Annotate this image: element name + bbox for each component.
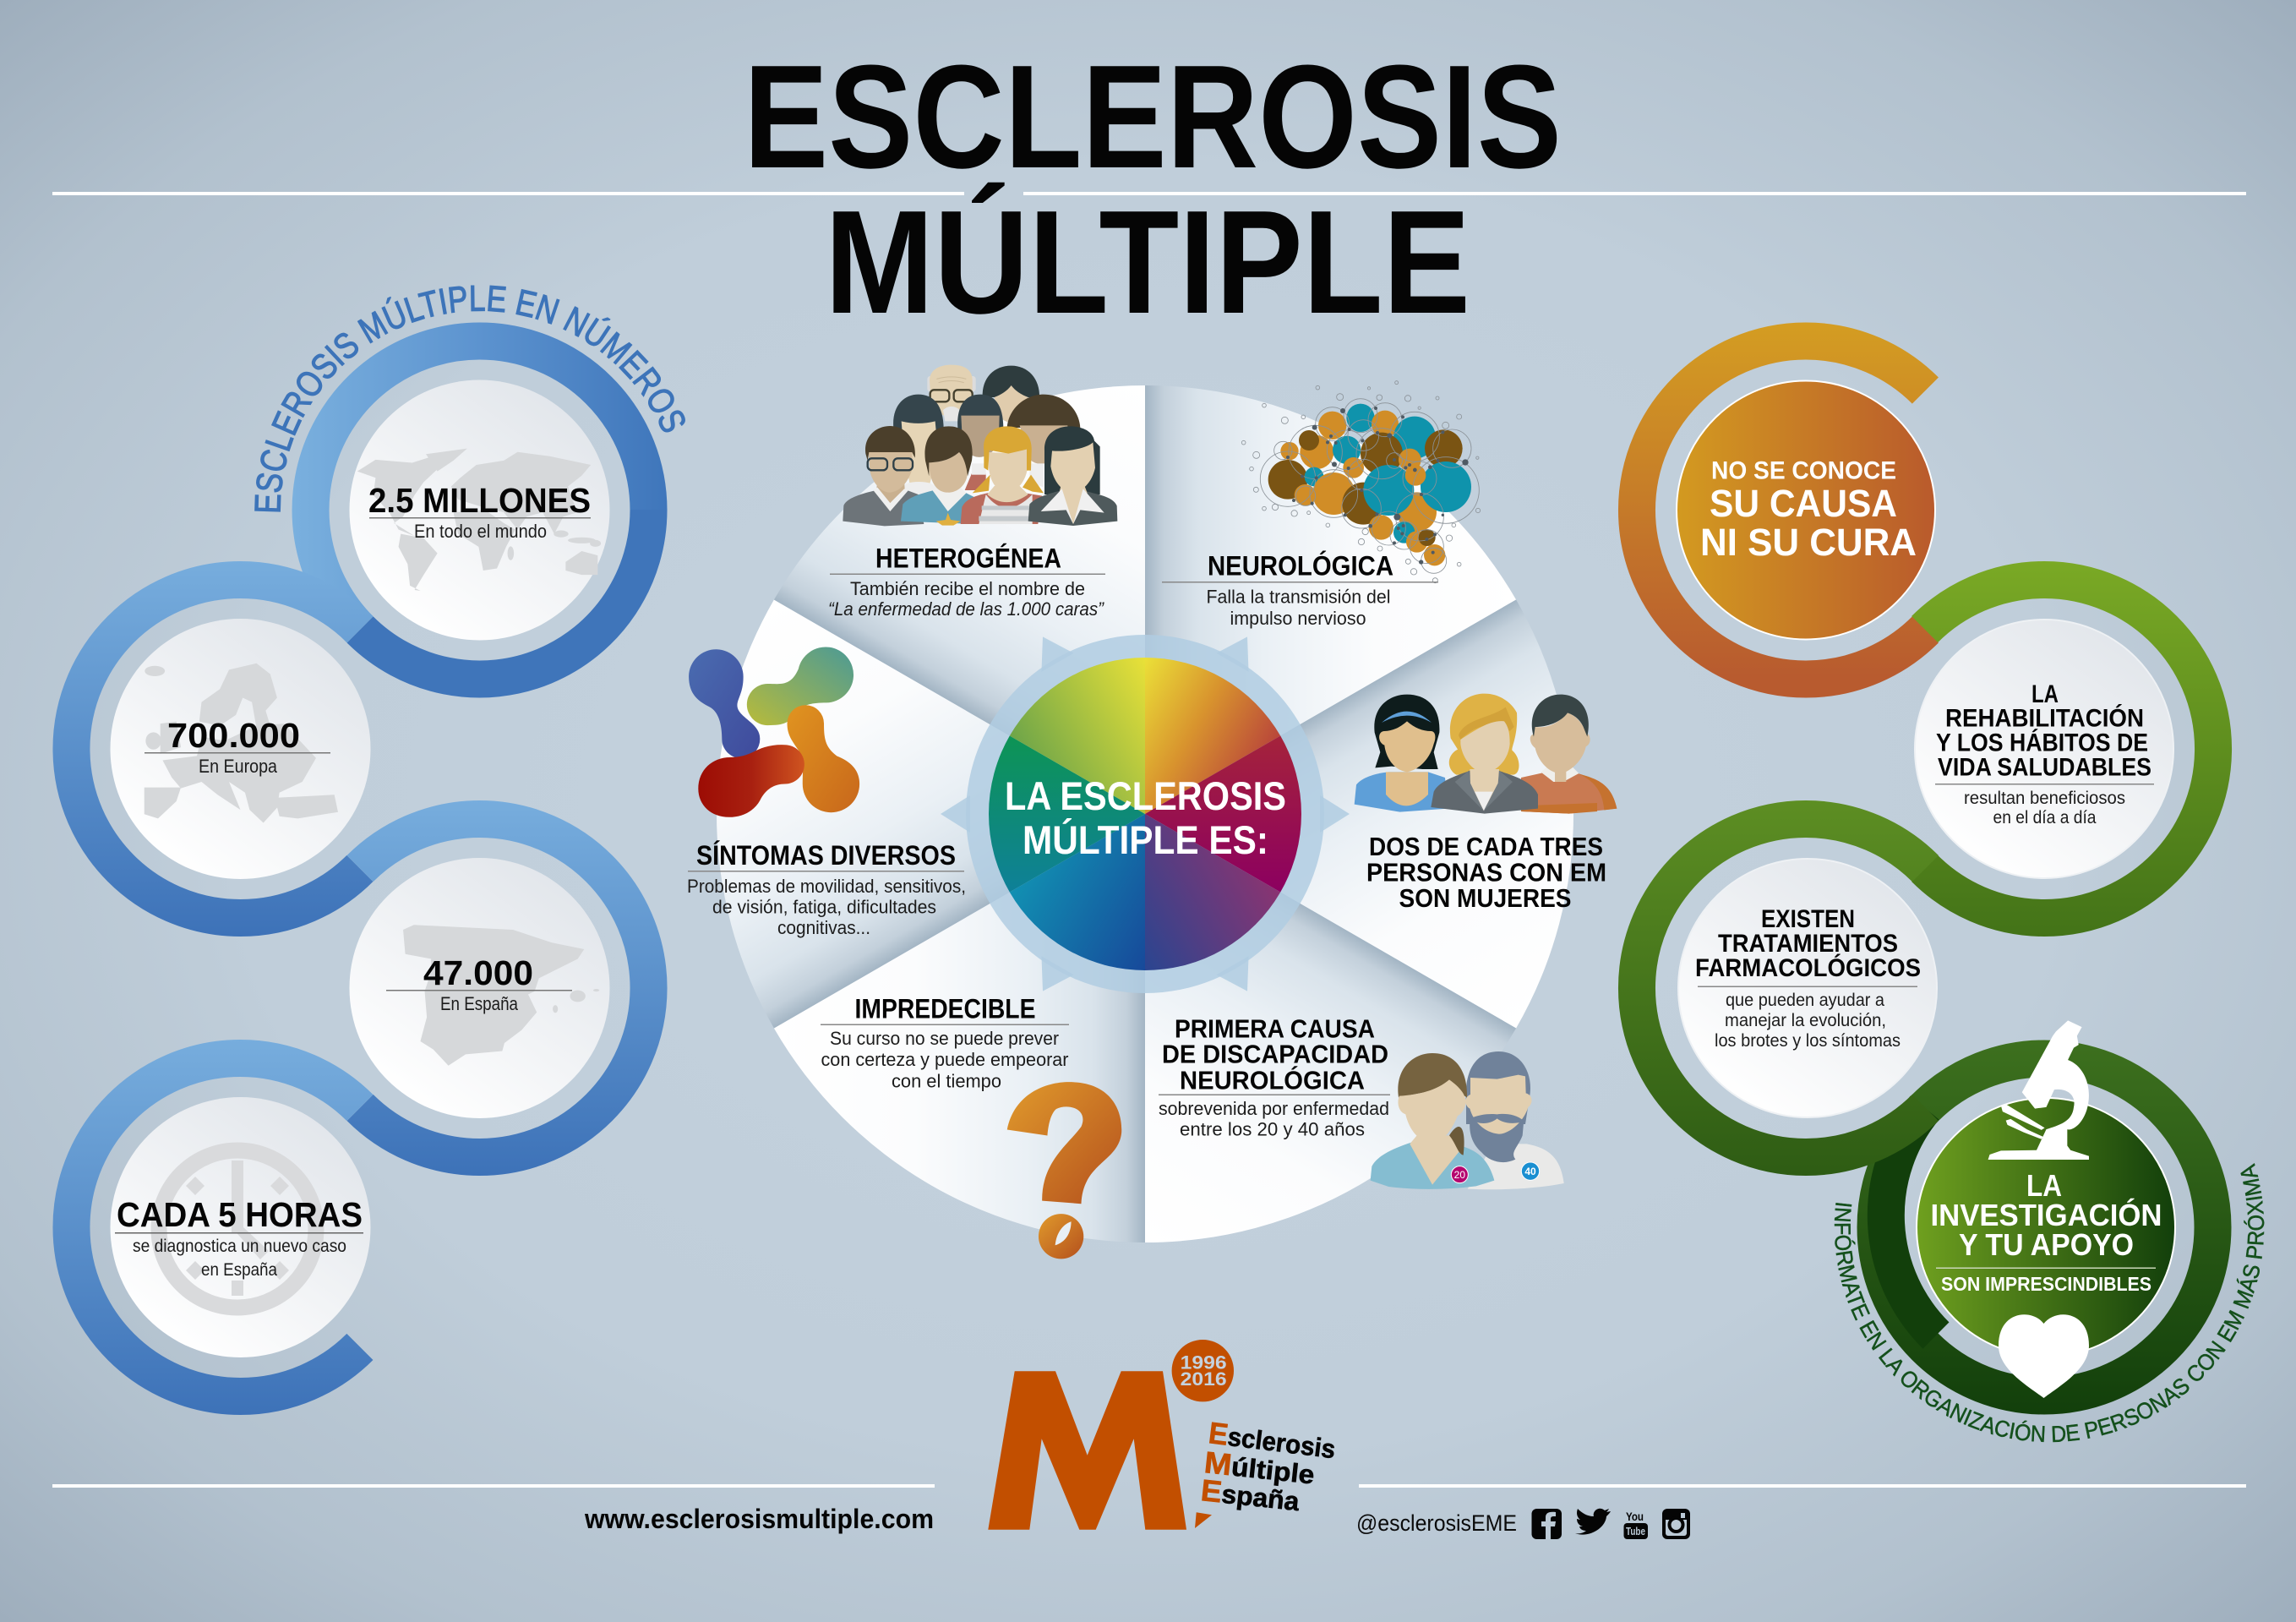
panel: numbers — [52, 286, 685, 1415]
title — [52, 34, 2246, 344]
icon: molecules — [689, 647, 859, 817]
fact: rehabilitation: Y LOS HÁBITOS DE — [1936, 729, 2148, 757]
website: www.esclerosismultiple.com — [584, 1504, 934, 1534]
text: impredecible: Su curso no se puede prever — [830, 1028, 1059, 1049]
text: neurologica — [1162, 549, 1438, 629]
fact: treatments: los brotes y los síntomas — [1715, 1031, 1901, 1051]
text: neurologica: NEUROLÓGICA — [1208, 549, 1393, 582]
fact: treatments: FARMACOLÓGICOS — [1695, 953, 1921, 982]
logo: 2016 — [1181, 1368, 1227, 1390]
fact: treatments — [1678, 859, 1937, 1117]
icon: heart — [1999, 1314, 2089, 1398]
text: primera causa: sobrevenida por enfermedad — [1159, 1098, 1389, 1119]
panel: facts ribbon — [1617, 323, 2265, 1442]
hub gear — [941, 627, 1350, 1001]
logo — [988, 1340, 1338, 1530]
icon: youtube — [1624, 1510, 1648, 1539]
icon: question mark — [1007, 1082, 1121, 1259]
fact: rehabilitation — [1915, 620, 2173, 878]
curved note: INFÓRMATE EN LA ORGANIZACIÓN DE PERSONAS CON EM MÁS PRÓXIMA — [1834, 1163, 2265, 1442]
stat: world — [350, 380, 610, 641]
caption: En Europa — [199, 756, 278, 777]
panel: central wheel — [588, 278, 1702, 1350]
orange green ribbon — [1637, 341, 2213, 1396]
text: impredecible: IMPREDECIBLE — [855, 994, 1036, 1024]
logo: Múltiple — [1203, 1445, 1317, 1491]
footer — [52, 1340, 2246, 1539]
stat: every five hours: en España — [201, 1260, 277, 1280]
hub heading: MÚLTIPLE ES: — [1023, 817, 1268, 862]
badge: 20 — [1451, 1166, 1468, 1183]
icon: young adults — [1371, 1051, 1564, 1189]
title line 1: ESCLEROSIS — [744, 34, 1562, 199]
logo: España — [1199, 1472, 1302, 1517]
text: primera causa — [1159, 1014, 1390, 1139]
fact: research: SON IMPRESCINDIBLES — [1941, 1273, 2151, 1295]
wheel sectors — [588, 278, 1702, 1350]
curved heading: ESCLEROSIS MÚLTIPLE EN NÚMEROS — [254, 286, 685, 512]
text: mujeres — [1366, 832, 1606, 913]
icon: youtube: Tube — [1626, 1525, 1645, 1537]
stat: spain — [350, 858, 610, 1118]
title line 2: MÚLTIPLE — [825, 179, 1470, 344]
fact: treatments: que pueden ayudar a — [1726, 991, 1884, 1010]
text: impredecible: con certeza y puede empeorar — [821, 1049, 1068, 1070]
icon: youtube: You — [1626, 1510, 1644, 1523]
badge: 40 — [1521, 1162, 1540, 1180]
text: mujeres: SON MUJERES — [1399, 883, 1572, 913]
fact: no cause no cure: SU CAUSA — [1710, 482, 1897, 525]
hub heading: LA ESCLEROSIS — [1005, 773, 1286, 818]
text: heterogenea: “La enfermedad de las 1.000 caras” — [828, 598, 1105, 620]
fact: research — [1917, 1020, 2175, 1398]
text: primera causa: entre los 20 y 40 años — [1180, 1119, 1365, 1139]
text: sintomas: cognitivas... — [777, 917, 870, 938]
caption: En todo el mundo — [414, 521, 547, 542]
fact: treatments: TRATAMIENTOS — [1718, 930, 1898, 958]
icon: neuron cloud — [1241, 381, 1481, 583]
stat: europe — [110, 619, 370, 879]
icon: twitter — [1575, 1509, 1611, 1535]
icon: group of people — [843, 365, 1117, 526]
fact: rehabilitation: REHABILITACIÓN — [1945, 703, 2144, 732]
text: impredecible — [821, 994, 1069, 1092]
fact: rehabilitation: resultan beneficiosos — [1964, 789, 2125, 808]
icon: instagram — [1662, 1509, 1690, 1539]
social handle: @esclerosisEME — [1356, 1510, 1517, 1536]
fact: research: INVESTIGACIÓN — [1930, 1197, 2162, 1232]
text: neurologica: Falla la transmisión del — [1207, 587, 1391, 607]
value: 700.000 — [167, 716, 300, 755]
fact: treatments: EXISTEN — [1761, 905, 1855, 933]
icon: europe map — [145, 664, 338, 822]
logo: 1996 — [1181, 1352, 1227, 1373]
icon: world map — [357, 449, 601, 591]
fact: no cause no cure: NO SE CONOCE — [1711, 456, 1896, 485]
text: primera causa: NEUROLÓGICA — [1180, 1065, 1365, 1095]
text: sintomas: Problemas de movilidad, sensitivos, — [687, 876, 966, 897]
value: CADA 5 HORAS — [117, 1195, 363, 1234]
caption: En España — [440, 993, 519, 1014]
value: 2.5 MILLONES — [368, 481, 591, 520]
text: impredecible: con el tiempo — [892, 1070, 1001, 1092]
fact: rehabilitation: LA — [2031, 680, 2059, 708]
fact: no cause no cure: NI SU CURA — [1700, 521, 1917, 564]
text: primera causa: PRIMERA CAUSA — [1175, 1014, 1375, 1043]
fact: research: Y TU APOYO — [1959, 1227, 2134, 1262]
blue ribbon — [71, 341, 649, 1396]
value: 47.000 — [423, 953, 533, 992]
colour wheel — [989, 658, 1301, 970]
text: mujeres: DOS DE CADA TRES — [1369, 832, 1603, 861]
badge: 20: 20 — [1454, 1169, 1465, 1181]
icon: microscope — [1988, 1020, 2089, 1160]
icon: spain map — [403, 925, 599, 1066]
stat: every five hours — [110, 1097, 370, 1357]
icon: facebook — [1531, 1509, 1562, 1539]
logo: Esclerosis — [1207, 1415, 1338, 1465]
fact: rehabilitation: en el día a día — [1993, 808, 2097, 827]
text: heterogenea — [828, 543, 1105, 620]
fact: rehabilitation: VIDA SALUDABLES — [1938, 754, 2151, 781]
text: mujeres: PERSONAS CON EM — [1366, 857, 1606, 887]
text: sintomas: de visión, fatiga, dificultades — [712, 896, 936, 918]
text: sintomas — [687, 839, 966, 938]
icon: three people — [1355, 694, 1617, 814]
title divider — [52, 192, 2246, 195]
text: heterogenea: También recibe el nombre de — [850, 578, 1085, 599]
text: primera causa: DE DISCAPACIDAD — [1162, 1040, 1388, 1068]
hub heading — [1005, 773, 1286, 862]
caption: se diagnostica un nuevo caso — [133, 1237, 346, 1256]
fact: no cause no cure — [1677, 380, 1935, 639]
fact: treatments: manejar la evolución, — [1725, 1011, 1886, 1030]
text: sintomas: SÍNTOMAS DIVERSOS — [696, 839, 956, 871]
footer divider — [52, 1484, 2246, 1488]
text: heterogenea: HETEROGÉNEA — [875, 543, 1061, 573]
badge: 40: 40 — [1524, 1166, 1536, 1177]
fact: research: LA — [2026, 1168, 2062, 1203]
text: neurologica: impulso nervioso — [1230, 608, 1366, 629]
icon: clock — [159, 1150, 316, 1308]
